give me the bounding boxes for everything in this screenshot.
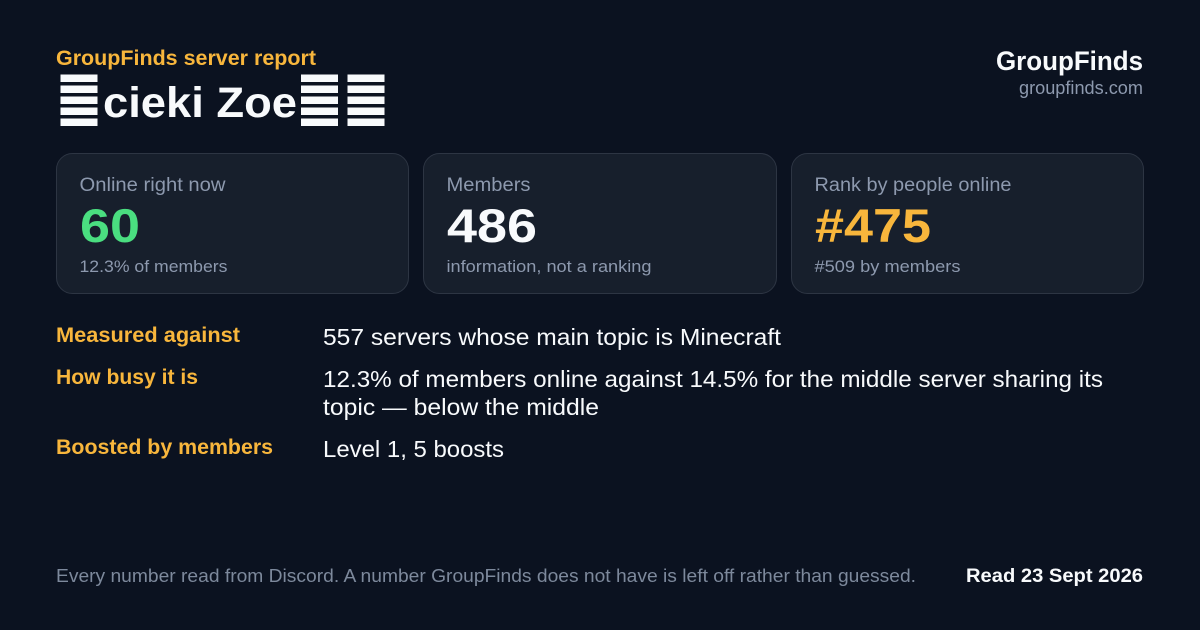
panel: members (424, 154, 776, 294)
footer note: Every number read from Discord. A number GroupFinds does not have is left off rather than guessed. (56, 566, 916, 586)
brand url: groupfinds.com (1019, 78, 1143, 98)
icon: left striped block glyph (60, 74, 98, 126)
row label: How busy it is (56, 366, 198, 389)
eyebrow heading: GroupFinds server report (56, 47, 316, 70)
detail row: measured against (56, 324, 782, 350)
card label: Rank by people online (814, 175, 1012, 196)
brand block (996, 46, 1143, 98)
card note: information, not a ranking (446, 257, 652, 276)
row value: 12.3% of members online against 14.5% for the middle server sharing its (323, 366, 1103, 392)
row label: Measured against (56, 324, 240, 347)
card label: Members (446, 175, 530, 196)
card note: 12.3% of members (80, 257, 228, 276)
card value: #475 (815, 199, 931, 252)
panel: online right now (56, 154, 408, 294)
brand name: GroupFinds (996, 46, 1143, 76)
panel: rank by people online (792, 154, 1144, 294)
row value: topic — below the middle (323, 394, 599, 420)
icon: right striped block glyph (348, 74, 384, 126)
detail row: boosted by members (56, 436, 504, 462)
server name: cieki Zoe (103, 79, 297, 127)
card label: Online right now (80, 175, 226, 196)
detail row: how busy it is (56, 366, 1103, 420)
card note: #509 by members (814, 257, 960, 276)
card value: 486 (447, 199, 537, 252)
title: server name with block glyphs (60, 74, 384, 127)
icon: middle striped block glyph (301, 74, 338, 126)
row label: Boosted by members (56, 436, 273, 459)
row value: Level 1, 5 boosts (323, 436, 504, 462)
read date: Read 23 Sept 2026 (966, 566, 1143, 587)
card value: 60 (80, 199, 140, 252)
row value: 557 servers whose main topic is Minecraft (323, 324, 782, 350)
